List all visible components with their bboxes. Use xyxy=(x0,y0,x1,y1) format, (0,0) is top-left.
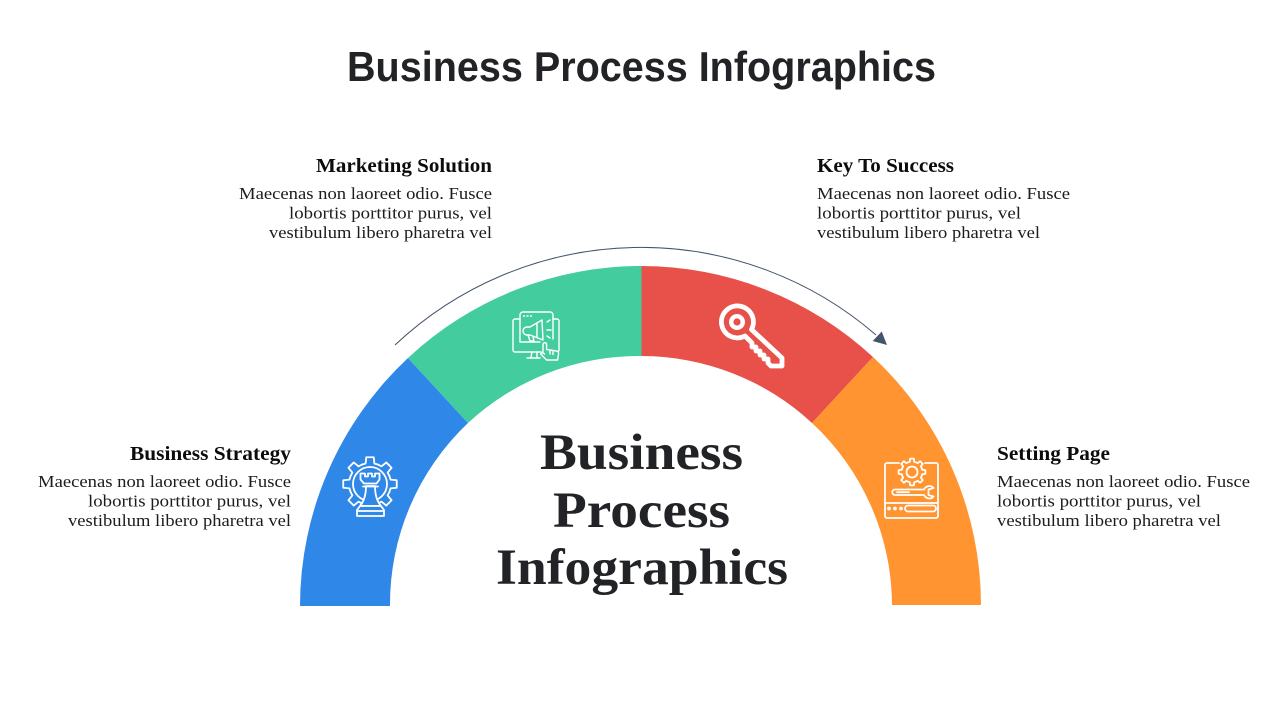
icon: chess rook in gear xyxy=(343,457,397,516)
text block: Setting Page: lobortis porttitor purus, vel xyxy=(997,492,1201,510)
arrow: process direction xyxy=(395,247,887,345)
segment: red xyxy=(642,266,873,423)
text block: Marketing Solution: lobortis porttitor purus, vel xyxy=(289,204,492,222)
text block: Setting Page xyxy=(997,443,1250,530)
segment: blue xyxy=(300,358,468,606)
segment: orange xyxy=(812,357,981,605)
icon: key xyxy=(721,306,782,366)
center label: Infographics xyxy=(496,540,788,596)
text block: Key To Success: vestibulum libero pharetra vel xyxy=(817,223,1040,242)
text block: Business Strategy xyxy=(38,443,292,530)
icon: settings window xyxy=(885,459,938,518)
text block: Business Strategy: Business Strategy xyxy=(130,443,292,465)
text block: Key To Success: Key To Success xyxy=(817,155,954,177)
text block: Key To Success xyxy=(817,155,1070,242)
text block: Business Strategy: lobortis porttitor purus, vel xyxy=(88,492,291,510)
icon: megaphone on monitor xyxy=(513,312,559,360)
semicircle chart xyxy=(300,266,981,606)
center label: Process xyxy=(553,483,730,539)
center label: Business xyxy=(540,425,743,481)
text block: Setting Page: vestibulum libero pharetra vel xyxy=(997,511,1221,530)
segment: green xyxy=(408,266,642,423)
title: Business Process Infographics xyxy=(347,43,936,90)
text block: Marketing Solution: vestibulum libero pharetra vel xyxy=(269,223,492,242)
text block: Marketing Solution: Marketing Solution xyxy=(316,155,493,177)
text block: Business Strategy: vestibulum libero pharetra vel xyxy=(68,511,291,530)
text block: Setting Page: Setting Page xyxy=(997,443,1110,465)
text block: Setting Page: Maecenas non laoreet odio. Fusce xyxy=(997,472,1250,491)
text block: Marketing Solution xyxy=(239,155,493,242)
text block: Key To Success: Maecenas non laoreet odio. Fusce xyxy=(817,184,1070,203)
text block: Business Strategy: Maecenas non laoreet odio. Fusce xyxy=(38,472,291,491)
text block: Key To Success: lobortis porttitor purus, vel xyxy=(817,204,1021,222)
text block: Marketing Solution: Maecenas non laoreet odio. Fusce xyxy=(239,184,492,203)
center label xyxy=(496,425,788,596)
